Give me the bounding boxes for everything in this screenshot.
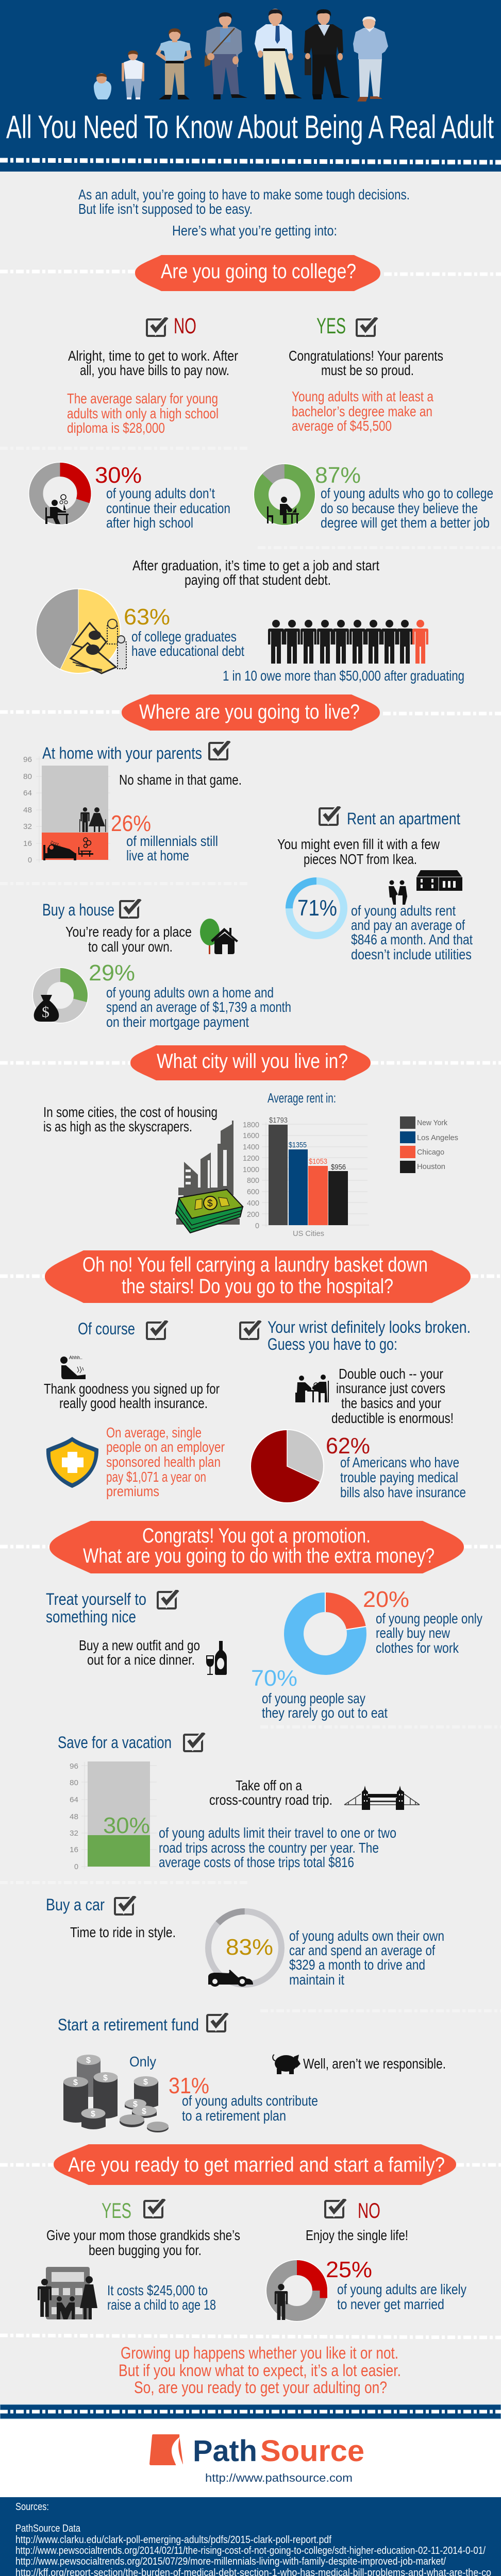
- icon: checkbox: [184, 1733, 204, 1751]
- text: limit travel: [159, 1825, 396, 1870]
- chart: average rent bars: US Cities: [293, 1229, 324, 1238]
- stat: 63% educational debt: [36, 589, 244, 673]
- label: NO: NO: [174, 314, 196, 338]
- icon: bridge: [344, 1786, 420, 1810]
- chart: 30% bar: 64: [70, 1795, 78, 1804]
- intro text: As an adult, you’re going to have to make some tough decisions.: [78, 187, 410, 202]
- stat: 1 in 10 owe: [223, 620, 464, 684]
- text: limit travel: of young adults limit their travel to one or two: [159, 1825, 396, 1841]
- number: 30%: 30%: [103, 1813, 150, 1838]
- panel: yes college: [289, 314, 443, 434]
- chart: average rent bars: $1053: [309, 1157, 327, 1166]
- icon: checkbox yes: [357, 317, 377, 336]
- chart: average rent bars: 1400: [243, 1143, 259, 1151]
- logo text: [193, 2434, 364, 2468]
- text: rent: of young adults rent: [351, 903, 456, 919]
- section heading: what city: What city will you live in?: [157, 1050, 348, 1073]
- section heading: what city: [130, 1045, 371, 1080]
- text: own a car: $329 a month to drive and: [289, 1957, 425, 1973]
- text: educational debt: of college graduates: [131, 629, 237, 645]
- text: single life: Enjoy the single life!: [306, 2227, 408, 2243]
- icon: desk and gears: [78, 838, 93, 857]
- text: own a home: [106, 985, 291, 1030]
- chart: 30% bar: [70, 1761, 157, 1871]
- text: medical bills: [340, 1454, 466, 1500]
- text: new outfit: [79, 1637, 200, 1668]
- closing text: [119, 2344, 401, 2397]
- text: only: Only: [129, 2054, 156, 2070]
- label: NO: NO: [358, 2198, 380, 2223]
- label: YES: YES: [102, 2198, 131, 2223]
- icon: tree and house: [200, 919, 238, 954]
- heading: Of course: [78, 1319, 135, 1338]
- logo: [149, 2434, 364, 2468]
- section heading: married: [54, 2144, 456, 2185]
- number: 29%: 29%: [89, 960, 135, 986]
- icon: checkbox: [147, 1320, 167, 1339]
- chart: donut clothes and eating out: [294, 1592, 366, 1665]
- chart: 26% bar: 64: [23, 789, 32, 798]
- chart: 26% bar: 80: [23, 772, 32, 781]
- icon: money and coins: [71, 619, 126, 673]
- chart: average rent bars: 200: [247, 1210, 259, 1219]
- icon: handshake: [389, 880, 407, 905]
- text: new outfit: Buy a new outfit and go: [79, 1637, 200, 1653]
- chart: average rent bars: 1000: [243, 1165, 259, 1174]
- text: own a home: on their mortgage payment: [106, 1014, 249, 1030]
- text: never married: of young adults are likely: [337, 2281, 466, 2297]
- text: rarely go out: they rarely go out to eat: [262, 1705, 388, 1721]
- text: medical bills: bills also have insurance: [340, 1484, 466, 1500]
- chart: ring 83%: [193, 1896, 296, 1999]
- heading: [46, 1590, 146, 1626]
- number: 20%: 20%: [363, 1587, 409, 1612]
- text: rent: [351, 903, 473, 962]
- text: cost of a child: It costs $245,000 to: [107, 2282, 208, 2298]
- text: educational debt: have educational debt: [131, 643, 244, 659]
- panel: treat yourself: [46, 1587, 482, 1721]
- text: Ikea: pieces NOT from Ikea.: [304, 851, 417, 867]
- number: 63%: 63%: [124, 604, 170, 630]
- text: rarely go out: of young people say: [262, 1690, 365, 1706]
- section heading: hospital: [45, 1250, 471, 1303]
- text: get to work: [68, 348, 238, 378]
- text: clothes for work: really buy new: [376, 1625, 450, 1641]
- text: no further education: of young adults don’t: [106, 485, 215, 501]
- chart legend: Los Angeles: [417, 1133, 458, 1142]
- text: rarely go out: [262, 1690, 388, 1721]
- text: own a home: of young adults own a home and: [106, 985, 274, 1001]
- text: high school salary: The average salary for young: [67, 391, 218, 406]
- icon: money bag: [34, 995, 59, 1022]
- chart: average rent bars: $1793: [269, 1116, 288, 1125]
- text: congratulations: [289, 348, 443, 378]
- panel: retirement fund: [58, 2013, 446, 2132]
- heading: Save for a vacation: [58, 1733, 172, 1752]
- text: bachelor salary: average of $45,500: [292, 418, 392, 434]
- text: double ouch: Double ouch -- your: [339, 1366, 443, 1382]
- closing text: But if you know what to expect, it’s a lot easier.: [119, 2361, 401, 2380]
- section heading: college: Are you going to college?: [161, 260, 356, 283]
- text: no further education: after high school: [106, 515, 193, 531]
- icon: stack of money: [176, 1190, 243, 1233]
- chart: 26% bar: 16: [23, 839, 32, 848]
- text: bachelor salary: [292, 388, 433, 434]
- figure: young man with messenger bag: [205, 12, 247, 99]
- heading: Treat yourself to: [46, 1590, 146, 1608]
- chart: 26% bar: 32: [23, 822, 32, 831]
- chart: 30% bar: 0: [74, 1862, 78, 1871]
- text: medical bills: of Americans who have: [340, 1454, 459, 1470]
- text: rent: doesn’t include utilities: [351, 946, 472, 962]
- number: 25%: 25%: [326, 2257, 372, 2282]
- intro text: Here’s what you’re getting into:: [172, 223, 337, 239]
- number: 71%: 71%: [297, 895, 337, 921]
- text: no further education: [106, 485, 230, 531]
- icon: money bag: $: [42, 1004, 49, 1021]
- text: sources heading: Sources:: [15, 2501, 49, 2513]
- stat: 30% no further education: [29, 463, 230, 531]
- icon: checkbox: [325, 2199, 345, 2217]
- number: 87%: 87%: [315, 463, 361, 488]
- icon: skyscrapers: [176, 1121, 240, 1225]
- text: clothes for work: clothes for work: [376, 1640, 459, 1656]
- icon: coin stacks: [63, 2055, 169, 2132]
- icon row: ten people: [268, 620, 428, 664]
- heading: Buy a house: [42, 901, 114, 919]
- icon: checkbox: [120, 899, 140, 918]
- chart: average rent bars: 600: [247, 1188, 259, 1196]
- closing text: Growing up happens whether you like it or not.: [121, 2344, 398, 2362]
- text: never married: [337, 2281, 466, 2312]
- icon: checkbox: [240, 1320, 260, 1339]
- icon: checkbox: [158, 1590, 178, 1608]
- chart: average rent bars: 1600: [243, 1131, 259, 1140]
- icon: wine: [206, 1641, 227, 1675]
- text: own a car: maintain it: [289, 1972, 344, 1988]
- text: thank goodness: [44, 1381, 220, 1411]
- text: cost of housing: In some cities, the cost of housing: [43, 1104, 218, 1120]
- text: cost of housing: [43, 1104, 218, 1134]
- text: millennials: of millennials still: [126, 833, 218, 849]
- chart: 26% bar: 96: [23, 755, 32, 764]
- text: own a car: car and spend an average of: [289, 1942, 435, 1958]
- text: grandkids: [46, 2227, 240, 2258]
- section heading: where to live: Where are you going to live?: [139, 701, 360, 723]
- number: 30%: 30%: [95, 463, 142, 488]
- text: source list: [15, 2523, 492, 2576]
- chart: average rent bars: 400: [247, 1199, 259, 1208]
- panel: rent an apartment: [277, 806, 473, 962]
- text: clothes for work: [376, 1611, 482, 1656]
- chart: average rent bars: 1200: [243, 1154, 259, 1163]
- number: 31%: 31%: [169, 2073, 209, 2098]
- text: millennials: live at home: [126, 848, 189, 863]
- icon: elderly parents: [79, 807, 106, 832]
- chart: ring 71%: [289, 881, 344, 936]
- icon: checkbox: [144, 2199, 164, 2217]
- number: 83%: 83%: [226, 1935, 273, 1960]
- text: cost of a child: raise a child to age 18: [107, 2297, 216, 2313]
- chart: pie 62%: [250, 1430, 324, 1503]
- text: grandkids: Give your mom those grandkids she’s: [46, 2227, 240, 2243]
- icon: checkbox: [209, 741, 229, 759]
- heading: [268, 1318, 471, 1353]
- text: retirement plan: [182, 2093, 318, 2124]
- figure: child: [122, 50, 144, 99]
- intro text: But life isn’t supposed to be easy.: [78, 201, 253, 217]
- icon: family and house: [38, 2267, 97, 2319]
- text: premiums: pay $1,071 a year on: [106, 1469, 206, 1485]
- chart: pie 63%: [36, 589, 121, 673]
- text: grandkids: been bugging you for.: [89, 2242, 202, 2258]
- panel: yes family: [38, 2198, 240, 2319]
- icon: coin stacks: $: [91, 2110, 95, 2119]
- text: after graduation: [132, 557, 379, 588]
- icon: person at desk: [45, 495, 69, 524]
- icon: injured person: [60, 1355, 86, 1379]
- icon: sleeping in bed: [43, 840, 76, 860]
- chart: donut 87%: [252, 462, 318, 528]
- text: own a home: spend an average of $1,739 a month: [106, 999, 291, 1015]
- text: road trip: [209, 1777, 332, 1808]
- heading: Buy a car: [46, 1895, 105, 1914]
- text: premiums: sponsored health plan: [106, 1454, 221, 1470]
- text: get to work: Alright, time to get to work. After: [68, 348, 238, 364]
- icon: coin stacks: $: [142, 2107, 146, 2116]
- chart: average rent bars: [243, 1116, 369, 1238]
- heading: Start a retirement fund: [58, 2015, 199, 2034]
- text: double ouch: the basics and your: [341, 1395, 441, 1411]
- logo text: Path: [193, 2434, 257, 2468]
- text: source list: http://www.pewsocialtrends.org/2015/07/29/more-millennials-living-with-family-despite-improved-job-market/: [15, 2556, 446, 2567]
- text: Ikea: You might even fill it with a few: [277, 836, 440, 852]
- icon: doctor visit: [295, 1375, 329, 1402]
- figure: teenager: [156, 28, 192, 99]
- icon: checkbox: [207, 2013, 227, 2031]
- icon: coin stacks: $: [103, 2074, 108, 2082]
- text: premiums: On average, single: [106, 1425, 202, 1440]
- icon: checkbox no: [147, 317, 167, 336]
- text: source list: http://www.clarku.edu/clark-poll-emerging-adults/pdfs/2015-clark-poll-report.pdf: [15, 2534, 331, 2546]
- text: limit travel: average costs of those trips total $816: [159, 1854, 354, 1870]
- text: double ouch: deductible is enormous!: [331, 1410, 454, 1426]
- icon: stack of money: $: [207, 1198, 213, 1209]
- text: premiums: [106, 1425, 225, 1499]
- chart: 26% bar: 48: [23, 806, 32, 815]
- icon: piggy bank: [273, 2055, 300, 2074]
- text: own a car: [289, 1928, 444, 1988]
- text: congratulations: Congratulations! Your parents: [289, 348, 443, 364]
- panel: header band: [0, 0, 501, 172]
- chart: average rent bars: $1355: [289, 1141, 307, 1149]
- number: 70%: 70%: [251, 1666, 297, 1691]
- text: millennials: [126, 833, 218, 863]
- section heading: married: Are you ready to get married and start a family?: [68, 2154, 445, 2176]
- text: educational debt: [131, 629, 244, 659]
- icon: coin stacks: $: [86, 2056, 91, 2065]
- text: ready for a place: [65, 924, 192, 955]
- closing text: So, are you ready to get your adulting on?: [134, 2378, 387, 2397]
- panel: no college: [67, 314, 238, 436]
- heading: Guess you have to go:: [268, 1335, 397, 1353]
- icon: coin stacks: $: [73, 2078, 78, 2087]
- logo text: Source: [260, 2434, 364, 2468]
- section heading: where to live: [122, 694, 380, 731]
- chart: 26% bar: [23, 755, 110, 865]
- text: bachelor salary: Young adults with at least a: [292, 388, 433, 404]
- figure: man in black suit with briefcase: [304, 9, 350, 99]
- chart: 30% bar: 96: [70, 1762, 78, 1771]
- figure: elderly man: [353, 16, 388, 101]
- icon: coin stacks: $: [133, 2100, 138, 2109]
- icon: checkbox: [320, 806, 340, 825]
- text: ready for a place: You’re ready for a place: [65, 924, 192, 940]
- text: source list: PathSource Data: [15, 2523, 81, 2534]
- chart title: Average rent in:: [268, 1090, 336, 1106]
- stat: 87% better job: [252, 462, 493, 531]
- url: http://www.pathsource.com: [205, 2471, 353, 2484]
- text: responsible: Well, aren’t we responsible.: [303, 2056, 446, 2072]
- section heading: college: [135, 255, 380, 291]
- text: high school salary: [67, 391, 219, 436]
- chart: donut 29%: [33, 968, 88, 1023]
- text: ride in style: Time to ride in style.: [70, 1924, 176, 1940]
- text: thank goodness: Thank goodness you signed up for: [44, 1381, 220, 1397]
- panel: buy a car: [46, 1895, 444, 1999]
- chart: average rent bars: 0: [255, 1222, 259, 1230]
- text: retirement plan: to a retirement plan: [182, 2108, 286, 2124]
- panel: footer logo: [0, 2419, 501, 2497]
- chart: 30% bar: 16: [70, 1845, 78, 1854]
- illustration: seven stages of life figures: [94, 9, 388, 101]
- icon: building: [416, 870, 462, 891]
- panel: no family: [266, 2198, 466, 2321]
- text: never married: to never get married: [337, 2296, 444, 2312]
- icon: coin stacks: $: [143, 2078, 148, 2087]
- text: no further education: continue their education: [106, 500, 230, 516]
- chart: 30% bar: 80: [70, 1778, 78, 1787]
- text: premiums: premiums: [106, 1483, 159, 1499]
- label: YES: YES: [316, 314, 346, 338]
- chart: 26% bar: 0: [28, 856, 32, 865]
- text: congratulations: must be so proud.: [321, 362, 414, 378]
- text: thank goodness: really good health insurance.: [59, 1395, 208, 1411]
- logo mark: [149, 2434, 183, 2466]
- chart legend: New York: [417, 1118, 447, 1127]
- text: high school salary: diploma is $28,000: [67, 420, 165, 436]
- section heading: hospital: Oh no! You fell carrying a laundry basket down: [82, 1253, 428, 1276]
- text: retirement plan: of young adults contribute: [182, 2093, 318, 2109]
- text: cost of housing: is as high as the skyscrapers.: [43, 1118, 192, 1134]
- chart: average rent bars: $956: [331, 1163, 346, 1172]
- text: medical bills: trouble paying medical: [340, 1469, 458, 1485]
- icon: car: [208, 1970, 253, 1987]
- panel: at home with parents: [23, 741, 242, 865]
- chart: donut 30%: [29, 463, 91, 524]
- number: 62%: 62%: [326, 1433, 370, 1459]
- panel: buy a house: [33, 899, 291, 1030]
- chart: 30% bar: 48: [70, 1812, 78, 1821]
- section heading: promotion: [49, 1521, 464, 1573]
- heading: something nice: [46, 1607, 136, 1626]
- text: better job: [321, 485, 493, 531]
- text: road trip: Take off on a: [236, 1777, 302, 1793]
- text: premiums: people on an employer: [106, 1439, 225, 1455]
- figure: baby: [94, 73, 111, 99]
- chart legend: Chicago: [417, 1148, 444, 1157]
- chart: 30% bar: 32: [70, 1829, 78, 1838]
- panel: save for a vacation: [58, 1733, 420, 1871]
- heading: Rent an apartment: [347, 809, 460, 828]
- chart: average rent bars: 800: [247, 1176, 259, 1185]
- divider band: [0, 2404, 501, 2419]
- text: no shame: No shame in that game.: [119, 772, 242, 788]
- text: get to work: all, you have bills to pay now.: [80, 362, 229, 378]
- text: cost of a child: [107, 2282, 216, 2313]
- text: bachelor salary: bachelor’s degree make an: [292, 403, 432, 419]
- chart legend: [400, 1116, 458, 1173]
- text: rent: and pay an average of: [351, 917, 465, 933]
- text: road trip: cross-country road trip.: [209, 1792, 332, 1808]
- text: limit travel: road trips across the country per year. The: [159, 1840, 379, 1856]
- section heading: promotion: Congrats! You got a promotion.: [142, 1524, 371, 1547]
- number: 26%: 26%: [111, 811, 151, 836]
- icon: injured person: Ahhh..: [69, 1355, 82, 1360]
- icon: person with money at desk: [267, 497, 299, 523]
- icon: insurance shield: [46, 1437, 98, 1488]
- intro text: [78, 187, 410, 239]
- text: rent: $846 a month. And that: [351, 931, 473, 947]
- panel: sources: [0, 2497, 501, 2576]
- panel: wrist broken: [240, 1318, 471, 1503]
- chart: average rent bars: 1800: [243, 1121, 259, 1129]
- text: own a car: of young adults own their own: [289, 1928, 444, 1944]
- text: Ikea: [277, 836, 440, 867]
- text: new outfit: out for a nice dinner.: [87, 1652, 195, 1668]
- chart: donut 25%: [266, 2260, 328, 2321]
- text: double ouch: [331, 1366, 454, 1426]
- icon: checkbox: [115, 1896, 135, 1914]
- icon: sleeping in bed: Zzzz..: [49, 840, 61, 847]
- panel: of course: [44, 1319, 225, 1499]
- heading: At home with your parents: [42, 744, 202, 762]
- icon: single person: [275, 2284, 288, 2320]
- section heading: hospital: the stairs! Do you go to the hospital?: [122, 1275, 393, 1298]
- text: after graduation: After graduation, it’s time to get a job and start: [132, 557, 379, 573]
- chart legend: Houston: [417, 1162, 445, 1171]
- text: high school salary: adults with only a high school: [67, 405, 219, 421]
- text: double ouch: insurance just covers: [336, 1380, 445, 1396]
- figure: man with tie: [255, 9, 302, 99]
- text: ready for a place: to call your own.: [88, 939, 173, 955]
- text: after graduation: paying off that student debt.: [185, 572, 331, 588]
